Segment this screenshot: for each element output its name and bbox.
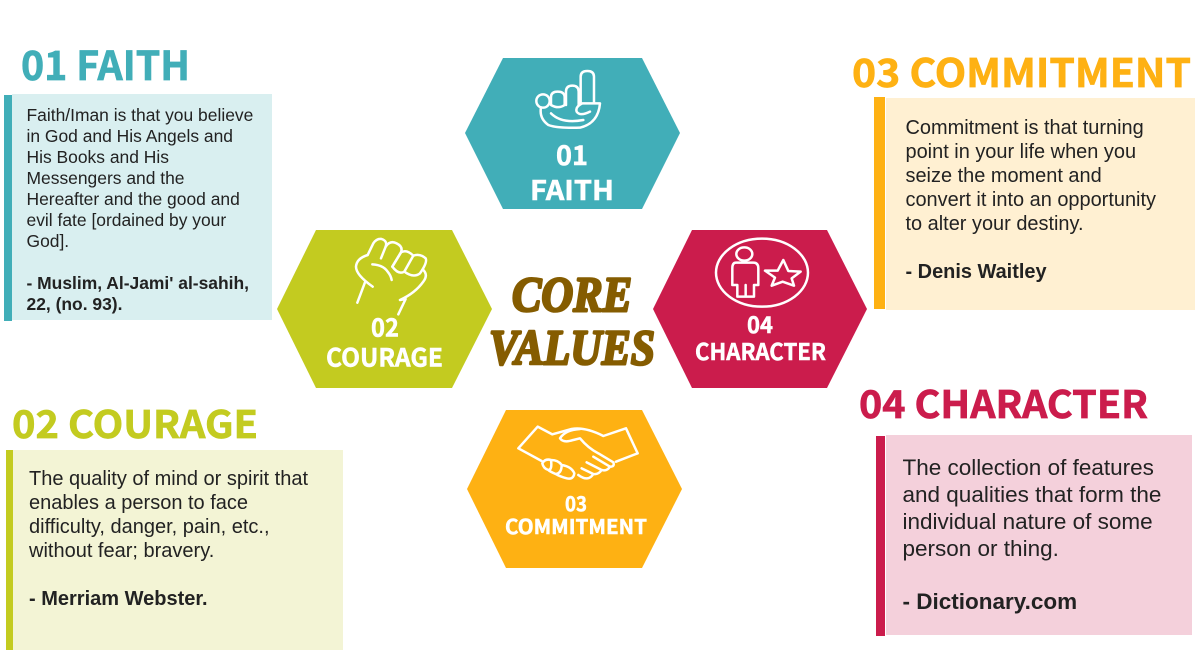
heading: 01 faith: 01 FAITH [21, 34, 190, 92]
panel background: character [886, 435, 1192, 635]
title: core values [489, 266, 655, 375]
panel: 02 courage [6, 394, 343, 650]
text block: courage definition [28, 468, 308, 610]
hexagon: 02 courage [277, 230, 492, 388]
text block: character definition: and qualities that form the [902, 482, 1161, 507]
text block: faith definition: God]. [26, 231, 69, 251]
label: character: CHARACTER [695, 333, 826, 367]
text block: faith definition: 22, (no. 93). [26, 294, 122, 314]
text block: character definition: individual nature of some [902, 509, 1153, 534]
text block: faith definition [26, 105, 253, 314]
text block: courage definition: The quality of mind or spirit that [29, 468, 308, 490]
text block: courage definition: - Merriam Webster. [29, 588, 208, 610]
text block: faith definition: Messengers and the [26, 168, 185, 188]
panel background: commitment [886, 98, 1195, 310]
hexagon: 04 character [653, 230, 867, 388]
panel background: courage [13, 450, 343, 650]
heading: 02 courage: 02 COURAGE [12, 394, 258, 449]
text block: courage definition: difficulty, danger, pain, etc., [29, 516, 270, 538]
icon: raised fist [356, 239, 426, 314]
panel: 03 commitment [852, 43, 1195, 310]
text block: commitment definition [906, 117, 1156, 283]
text block: character definition [902, 455, 1161, 614]
title: core values: VALUES [489, 319, 655, 375]
text block: courage definition: enables a person to face [29, 492, 248, 514]
text block: commitment definition: convert it into an opportunity [906, 189, 1156, 211]
label: 03: 03 [565, 488, 587, 517]
text block: commitment definition: seize the moment and [906, 165, 1102, 187]
heading: 04 character: 04 CHARACTER [859, 374, 1148, 429]
label: commitment: COMMITMENT [505, 511, 647, 540]
hexagon: 03 commitment [467, 410, 682, 568]
label: 01: 01 [556, 134, 588, 173]
text block: character definition: The collection of features [902, 455, 1154, 480]
icon: handshake [518, 427, 638, 479]
text block: character definition: person or thing. [902, 536, 1059, 561]
accent bar: commitment [874, 97, 885, 309]
text block: faith definition: in God and His Angels and [26, 126, 233, 146]
text block: faith definition: evil fate [ordained by your [26, 210, 226, 230]
text block: character definition: - Dictionary.com [902, 589, 1077, 614]
panel background: faith [12, 94, 272, 320]
panel: 01 faith [4, 34, 272, 321]
title: core values: CORE [512, 266, 632, 322]
text block: commitment definition: to alter your destiny. [906, 213, 1084, 235]
panel: 04 character [859, 374, 1192, 636]
text block: commitment definition: - Denis Waitley [906, 261, 1047, 283]
label: faith: FAITH [530, 169, 614, 208]
label: 04: 04 [747, 306, 773, 340]
text block: faith definition: Hereafter and the good and [26, 189, 240, 209]
label: courage: COURAGE [326, 338, 443, 374]
accent bar: character [876, 436, 885, 636]
text block: commitment definition: point in your life when you [906, 141, 1136, 163]
text block: faith definition: His Books and His [26, 147, 169, 167]
text block: faith definition: - Muslim, Al-Jami' al-sahih, [26, 273, 249, 293]
text block: commitment definition: Commitment is that turning [906, 117, 1144, 139]
text block: faith definition: Faith/Iman is that you believe [26, 105, 253, 125]
text block: courage definition: without fear; bravery. [28, 540, 214, 562]
label: 02: 02 [371, 308, 399, 344]
icon: pointing finger hand [536, 71, 600, 128]
accent bar: courage [6, 450, 13, 650]
hexagon: 01 faith [465, 58, 680, 209]
icon: person and star in circle [716, 239, 808, 307]
heading: 03 commitment: 03 COMMITMENT [852, 43, 1191, 99]
accent bar: faith [4, 95, 12, 321]
